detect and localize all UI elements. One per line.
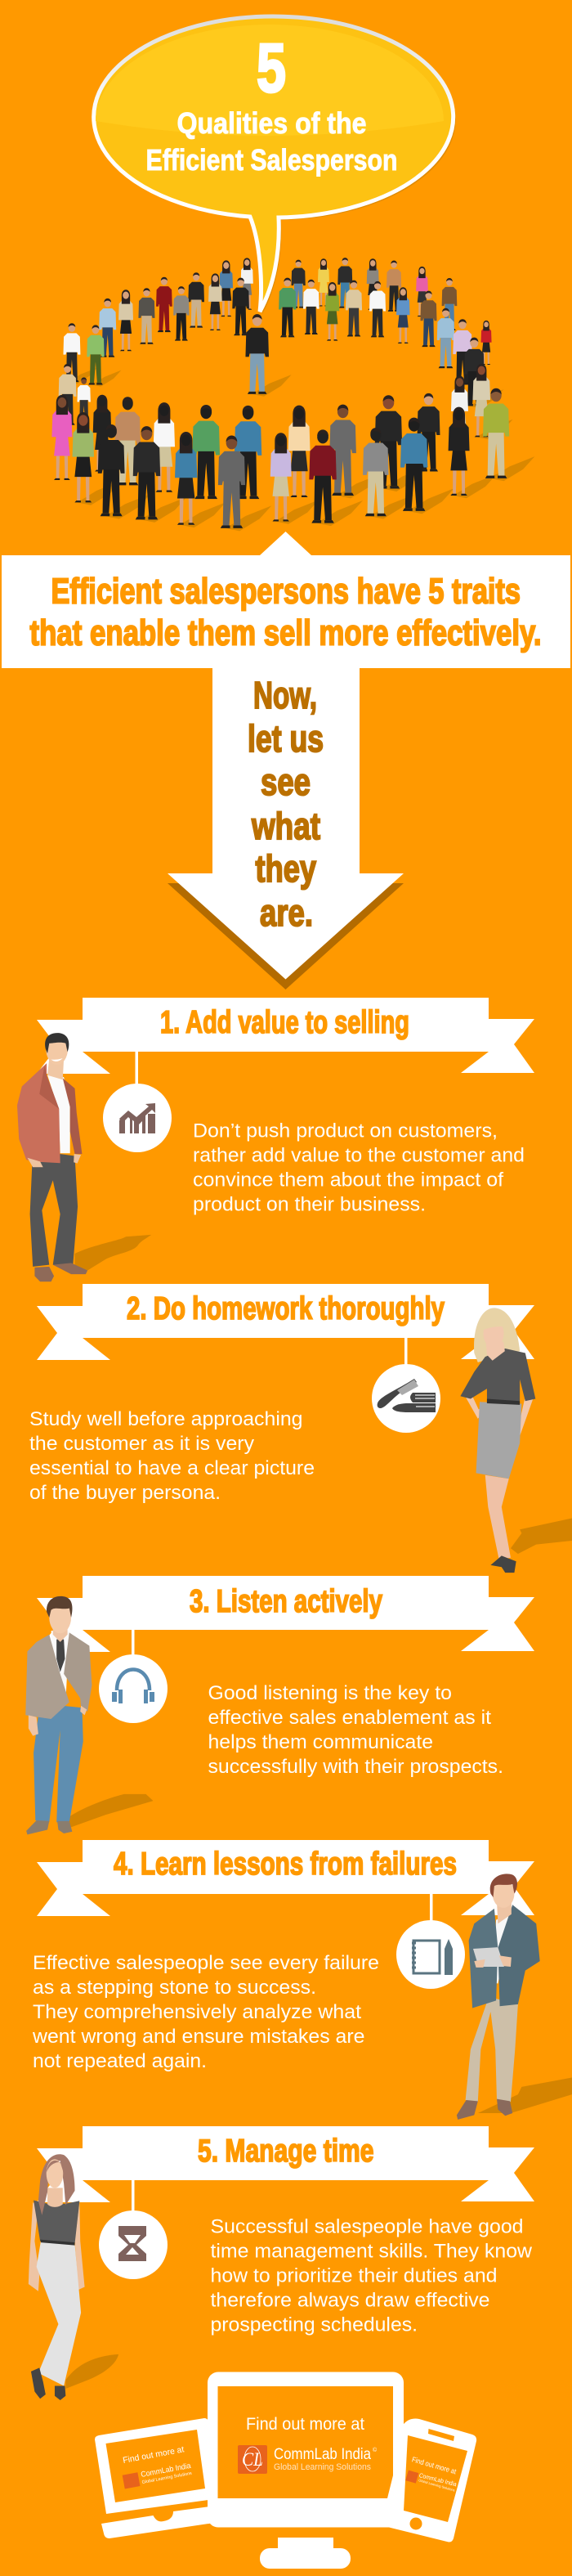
body text 2: essential to have a clear picture: [29, 1457, 315, 1479]
number 5: 5: [257, 29, 286, 106]
body text 5: therefore always draw effective: [211, 2290, 490, 2311]
body text 3: successfully with their prospects.: [208, 1756, 503, 1778]
body text 5: prospecting schedules.: [211, 2314, 418, 2336]
section 4: [32, 1840, 572, 2120]
laptop: Global Learning Solutions: [141, 2471, 193, 2485]
arrow text: [248, 674, 324, 934]
circle of salespeople: [51, 258, 534, 531]
title line 2: Efficient Salesperson: [145, 143, 397, 177]
body text 2: the customer as it is very: [29, 1433, 254, 1455]
body text 1: rather add value to the customer and: [193, 1145, 525, 1166]
icon: notebook and pencil: [396, 1920, 465, 1989]
ribbon 4: [37, 1840, 534, 1916]
ribbon 5: 5. Manage time: [198, 2134, 374, 2169]
laptop: CommLab India: [141, 2462, 192, 2480]
speech bubble title: [94, 16, 456, 314]
section 5: [29, 2126, 534, 2400]
logo mark: CL: [242, 2449, 263, 2470]
find out more text: Find out more at: [246, 2415, 364, 2434]
icon: books: [372, 1364, 440, 1433]
laptop: Find out more at: [122, 2444, 185, 2466]
ribbon 3: 3. Listen actively: [190, 1584, 382, 1619]
ribbon 1: [37, 998, 534, 1074]
body text 3: [208, 1682, 503, 1778]
logo mark: [238, 2445, 267, 2474]
body text 3: Good listening is the key to: [208, 1682, 452, 1704]
body text 4: [32, 1952, 379, 2072]
phone: CommLab India: [418, 2471, 458, 2488]
phone: Global Learning Solutions: [418, 2478, 455, 2493]
character: man in beige blazer: [25, 1596, 153, 1834]
body text 4: as a stepping stone to success.: [33, 1977, 316, 1999]
body text 3: effective sales enablement as it: [208, 1707, 491, 1729]
phone: Find out more at: [411, 2455, 458, 2475]
body text 5: time management skills. They know: [211, 2241, 533, 2262]
arrow text: are.: [260, 891, 313, 934]
icon: headphones: [99, 1654, 168, 1723]
title line 1: Qualities of the: [177, 106, 366, 140]
arrow text: let us: [248, 717, 324, 760]
body text 5: how to prioritize their duties and: [211, 2265, 497, 2287]
ribbon 1: 1. Add value to selling: [160, 1005, 409, 1040]
arrow text: they: [255, 847, 316, 890]
arrow text: Now,: [253, 674, 317, 716]
logo wordmark: CommLab India: [274, 2446, 371, 2463]
body text 1: Don’t push product on customers,: [193, 1120, 498, 1142]
body text 4: went wrong and ensure mistakes are: [32, 2026, 365, 2048]
body text 1: convince them about the impact of: [193, 1169, 503, 1191]
body text 5: [211, 2216, 533, 2336]
body text 2: [29, 1408, 315, 1504]
body text 5: Successful salespeople have good: [211, 2216, 523, 2237]
desktop monitor: [208, 2372, 404, 2569]
body text 1: [193, 1120, 525, 1215]
character: blonde woman in grey skirt: [460, 1308, 572, 1573]
character: man with tablet: [457, 1874, 572, 2120]
body text 1: product on their business.: [193, 1194, 426, 1215]
icon: rising chart: [103, 1084, 172, 1152]
section 2: [29, 1284, 572, 1573]
section 3: [25, 1576, 534, 1834]
arrow text: see: [261, 761, 311, 803]
section 1: [17, 998, 534, 1281]
laptop: [95, 2418, 214, 2538]
body text 4: not repeated again.: [33, 2050, 207, 2072]
ribbon 4: 4. Learn lessons from failures: [114, 1847, 457, 1882]
down arrow: [168, 668, 404, 990]
body text 4: Effective salespeople see every failure: [33, 1952, 379, 1974]
arrow text: what: [251, 805, 320, 847]
ribbon 3: [37, 1576, 534, 1652]
character: woman in white trousers: [29, 2154, 118, 2400]
phone: [387, 2419, 476, 2542]
ribbon 2: [37, 1284, 534, 1360]
ribbon 5: [37, 2126, 534, 2202]
body text 2: Study well before approaching: [29, 1408, 302, 1430]
desktop monitor: ©: [373, 2447, 378, 2453]
desktop monitor: Global Learning Solutions: [274, 2462, 371, 2472]
body text 3: helps them communicate: [208, 1731, 433, 1753]
body text 2: of the buyer persona.: [29, 1482, 221, 1504]
intro banner with up pointer: [2, 532, 570, 668]
character: man in red jacket: [17, 1033, 151, 1281]
ribbon 2: 2. Do homework thoroughly: [127, 1291, 445, 1326]
icon: hourglass: [99, 2210, 168, 2279]
body text 4: They comprehensively analyze what: [33, 2001, 361, 2023]
devices call to action: [95, 2372, 476, 2569]
